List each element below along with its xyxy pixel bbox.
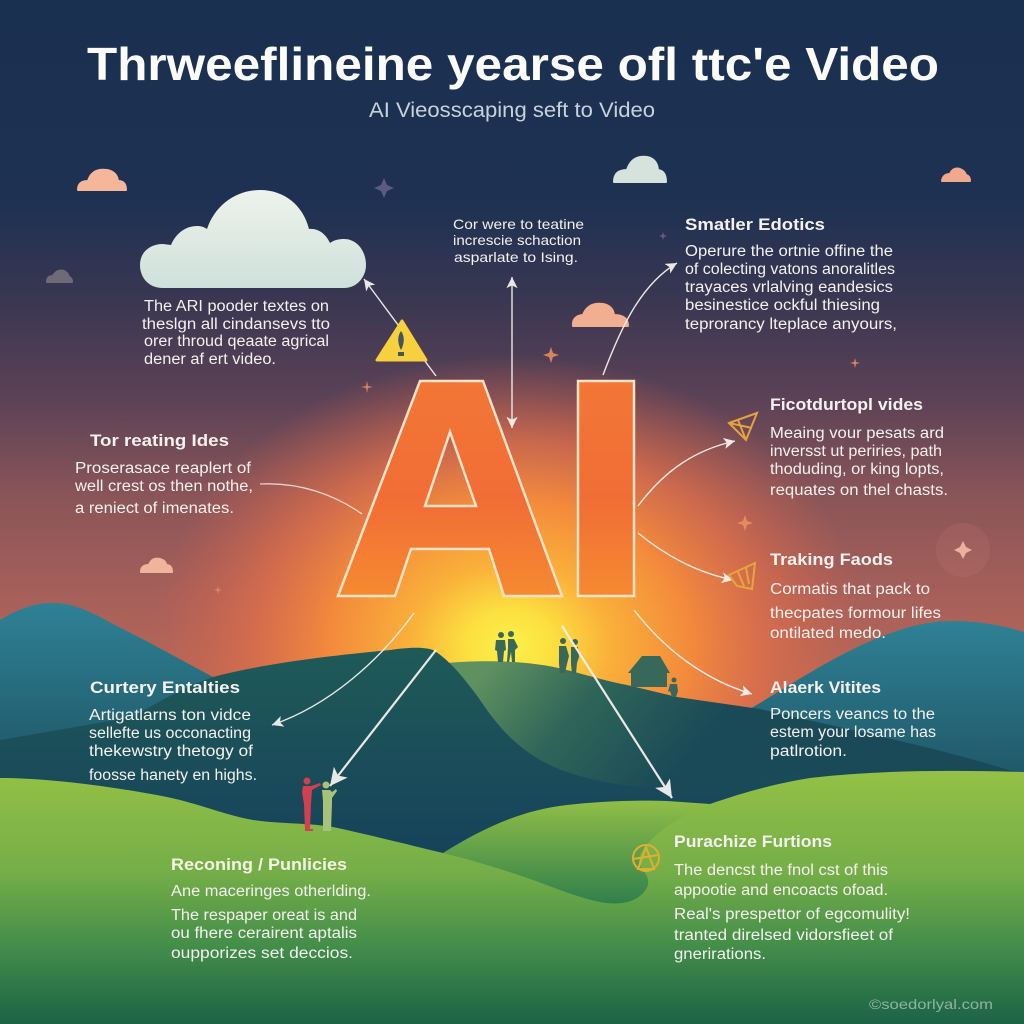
panel: Tor reating Ides: Tor reating Ides [90, 431, 229, 450]
panel: Smatler Edotics: Operure the ortnie offine the [685, 243, 893, 260]
icon: tag outline [729, 563, 755, 589]
panel: Reconing / Punlicies: The respaper oreat is and [171, 907, 357, 924]
panel: Curtery Entalties: Artigatlarns ton vidce [89, 707, 251, 724]
icon: warning triangle [377, 321, 426, 360]
arrow to Smatler Edotics [603, 263, 677, 375]
panel: Alaerk Vitites: patlrotion. [770, 743, 847, 760]
panel: Ficotdurtopl vides: inversst ut periries, path [770, 443, 942, 460]
arrow to Alaerk Vitites [634, 610, 752, 694]
panel: Smatler Edotics: besinestice ockful thiesing [685, 297, 880, 314]
arrow to Purachize Furtions [562, 626, 672, 798]
panel: Reconing / Punlicies: Reconing / Punlicies [171, 855, 347, 874]
arrow to large cloud [364, 279, 436, 376]
text block: under large cloud: orer throud qeaate agrical [144, 333, 329, 350]
panel: Purachize Furtions: The dencst the fnol cst of this [674, 862, 888, 879]
hill: front foreground [0, 771, 1024, 1024]
panel: Tor reating Ides: Proserasace reaplert of [75, 460, 252, 477]
panel: Smatler Edotics: teprorancy lteplace anyours, [685, 316, 897, 333]
arrow to people [330, 650, 436, 786]
connector: Tor reating Ides [260, 484, 362, 514]
letter A [338, 381, 562, 596]
panel: Curtery Entalties: sellefte us occonacting [89, 725, 251, 742]
cloud: small grey left [47, 271, 72, 282]
panel: Smatler Edotics: of colecting vatons anoralitles [685, 261, 895, 278]
text block: under large cloud: theslgn all cindansevs tto [142, 316, 330, 333]
house silhouette [628, 656, 670, 687]
panel: Reconing / Punlicies: Ane maceringes otherlding. [171, 883, 371, 900]
panel: Ficotdurtopl vides: requates on thel chasts. [770, 482, 948, 499]
figure: green person [322, 782, 337, 831]
silhouettes on hill [495, 631, 678, 697]
panel: Reconing / Punlicies: ou fhere cerairent aptalis [171, 925, 357, 942]
panel: Reconing / Punlicies [171, 855, 371, 962]
panel: Ficotdurtopl vides: Ficotdurtopl vides [770, 395, 923, 414]
arrow vertical centre [511, 277, 513, 428]
panel: Traking Faods: Traking Faods [770, 550, 893, 569]
text block: under large cloud: The ARI pooder textes on [144, 298, 329, 315]
panel: Smatler Edotics: Smatler Edotics [685, 215, 825, 234]
cloud: large white [140, 190, 366, 288]
panel: Purachize Furtions [674, 832, 910, 963]
text block: under large cloud [142, 298, 330, 368]
arrow to Ficotdurtopl vides [638, 441, 735, 506]
panel: Traking Faods: Cormatis that pack to [770, 581, 930, 598]
subtitle: AI Vieosscaping seft to Video [369, 99, 655, 122]
hill: back left blue [0, 603, 300, 780]
sparkle stars [214, 178, 990, 594]
letter I [578, 381, 634, 596]
panel: Smatler Edotics [685, 215, 897, 333]
panel: Ficotdurtopl vides [770, 395, 948, 499]
panel: Purachize Furtions: gnerirations. [674, 946, 766, 963]
watermark: ©soedorlyal.com [869, 996, 993, 1012]
figure: red person [302, 778, 321, 831]
panel: Reconing / Punlicies: oupporizes set deccios. [171, 945, 353, 962]
cloud: small peach top right [942, 169, 970, 181]
panel: Tor reating Ides [74, 431, 253, 517]
text block: centre top [453, 216, 584, 265]
cloud: peach centre right [573, 304, 628, 326]
panel: Traking Faods: ontilated medo. [770, 625, 886, 642]
panel: Purachize Furtions: Real's prespettor of egcomulity! [674, 906, 910, 923]
hill: back right blue [748, 621, 1024, 790]
panel: Traking Faods: thecpates formour lifes [770, 605, 941, 622]
figures: two people [559, 638, 579, 674]
figure by house [668, 678, 678, 697]
icon: pentagon badge [633, 845, 659, 871]
panel: Traking Faods [770, 550, 941, 642]
panel: Purachize Furtions: Purachize Furtions [674, 832, 832, 851]
hill: front middle [443, 801, 710, 920]
icon: flag outline [729, 413, 757, 440]
panel: Purachize Furtions: tranted direlsed vidorsfieet of [674, 927, 894, 944]
arrow to Traking Faods [638, 533, 733, 580]
hill: back green [430, 661, 1024, 900]
text block: centre top: increscie schaction [453, 232, 581, 248]
figures: group on hill [495, 631, 518, 662]
panel: Smatler Edotics: trayaces vrlalving eandesics [685, 279, 893, 296]
connector arrows [272, 263, 752, 798]
title: Thrweeflineine yearse ofl ttc'e Video [87, 38, 939, 90]
panel: Tor reating Ides: well crest os then nothe, [74, 478, 253, 495]
panel: Curtery Entalties: foosse hanety en highs. [89, 767, 257, 784]
panel: Curtery Entalties [89, 678, 257, 784]
arrow to Curtery Entalties [272, 613, 414, 725]
panel: Alaerk Vitites: Alaerk Vitites [770, 678, 881, 697]
letters AI [338, 381, 634, 596]
sunset glow [150, 355, 870, 935]
panel: Curtery Entalties: thekewstry thetogy of [89, 743, 254, 760]
panel: Ficotdurtopl vides: thoduding, or king lopts, [770, 461, 944, 478]
cloud: small peach top left [78, 170, 126, 190]
panel: Curtery Entalties: Curtery Entalties [90, 678, 240, 697]
panel: Ficotdurtopl vides: Meaing vour pesats ard [770, 425, 944, 442]
cloud: small peach lower left [141, 559, 172, 572]
panel: Alaerk Vitites: Poncers veancs to the [770, 706, 935, 723]
text block: under large cloud: dener af ert video. [144, 351, 276, 368]
decorative clouds [47, 157, 970, 572]
panel: Purachize Furtions: appootie and encoacts ofoad. [674, 882, 888, 899]
hill: front dark lobe [0, 648, 800, 900]
cloud: small pale top centre [614, 157, 666, 182]
text block: centre top: Cor were to teatine [453, 216, 584, 232]
panel: Alaerk Vitites [770, 678, 936, 760]
panel: Alaerk Vitites: estem your losame has [770, 724, 936, 741]
panel: Tor reating Ides: a reniect of imenates. [75, 500, 234, 517]
text block: centre top: asparlate to Ising. [454, 249, 578, 265]
